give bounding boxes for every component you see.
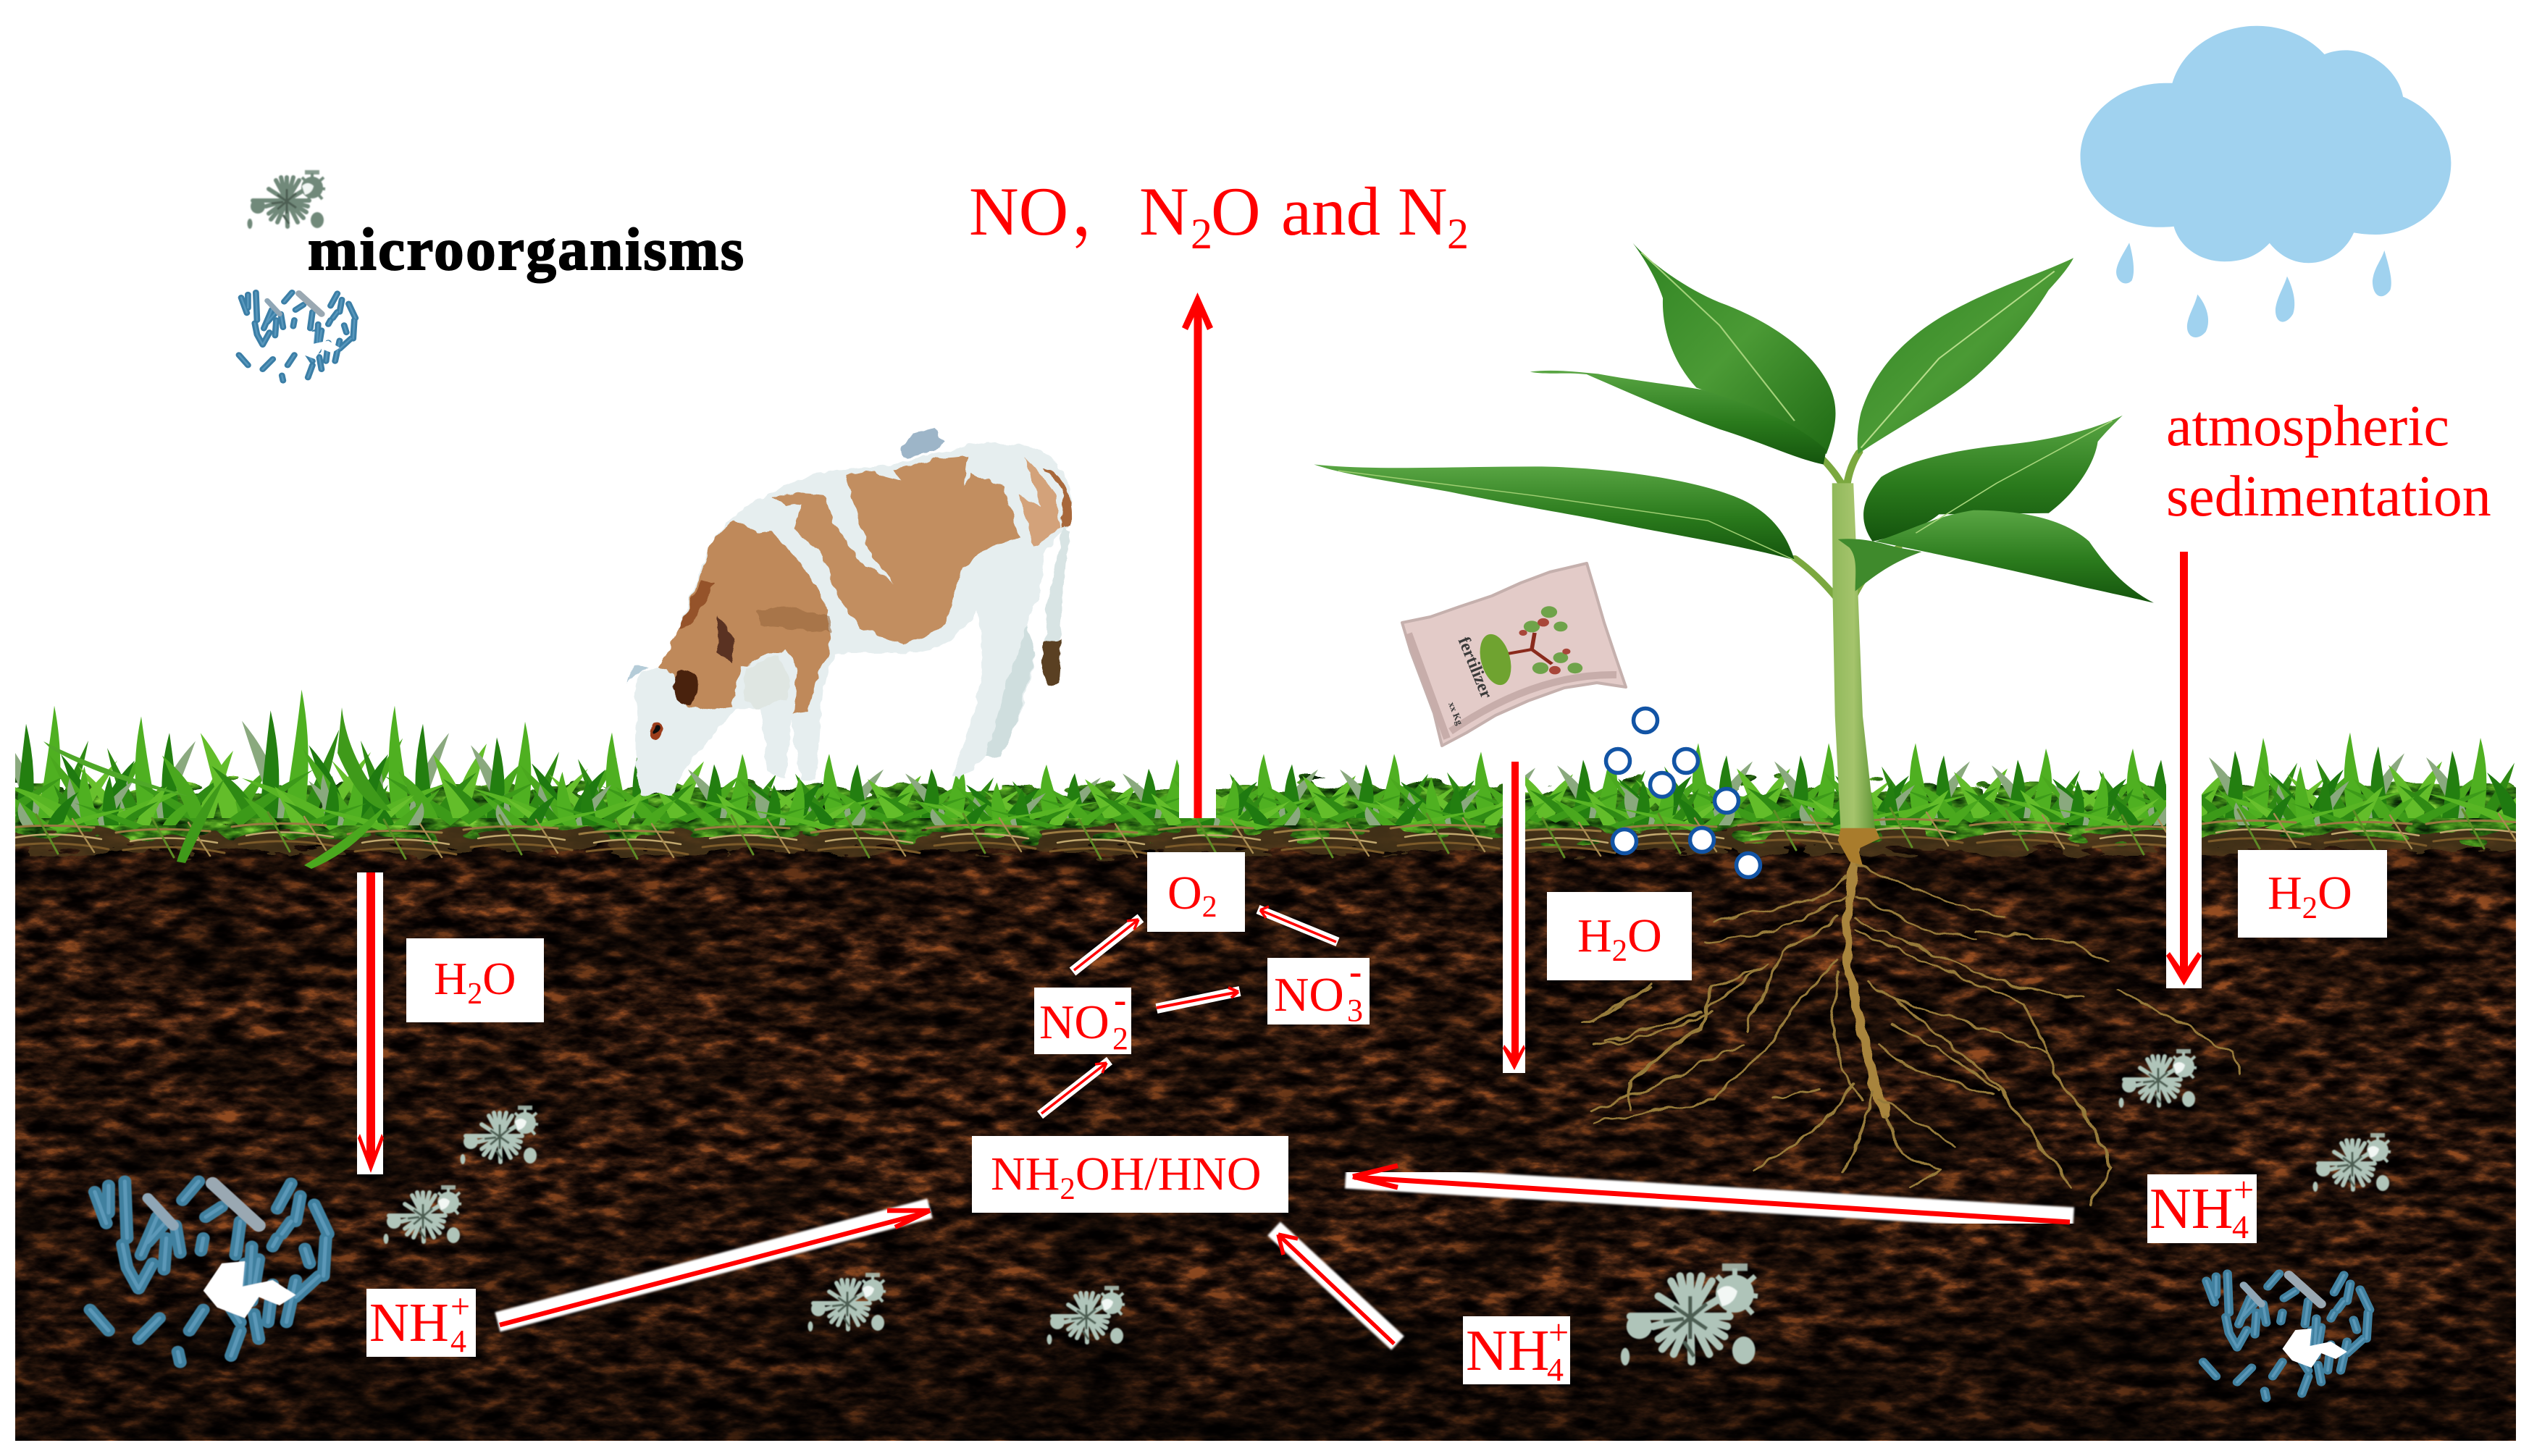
cow tail tuft xyxy=(1042,639,1062,685)
cow belly shadow xyxy=(757,606,831,632)
cow tail xyxy=(1043,467,1072,529)
cow brown shoulder patch xyxy=(659,521,831,714)
heading: gas products: and xyxy=(1281,173,1380,250)
arrow: NH4 bottom to NH2OH xyxy=(1274,1229,1398,1344)
cow neck spot xyxy=(717,614,734,662)
raindrop 4 xyxy=(2373,251,2391,296)
raindrop 1 xyxy=(2116,243,2134,283)
heading: gas products: NO xyxy=(969,173,1068,250)
arrow: NO3 to O2 xyxy=(1258,906,1338,942)
fertilizer granules xyxy=(1606,708,1760,878)
box: O2: 2 xyxy=(1202,891,1217,924)
box: NO3-: NO xyxy=(1274,968,1344,1022)
cow body xyxy=(636,442,1071,794)
leaf: right upper xyxy=(1863,416,2123,542)
box: NH4+ right xyxy=(2147,1169,2257,1245)
leaf: right top xyxy=(1858,258,2073,454)
arrow: NO2 to O2 xyxy=(1073,918,1141,972)
box: NH4+ bottom: NH xyxy=(1466,1319,1550,1383)
root collar xyxy=(1838,828,1880,865)
cow eye xyxy=(649,723,663,741)
cow rump patch xyxy=(1019,458,1060,547)
box: O2: O xyxy=(1167,867,1202,920)
tree roots xyxy=(1581,838,2241,1205)
box: H2O left xyxy=(406,938,544,1022)
grass strip xyxy=(0,689,2529,869)
arrow: atmospheric deposition xyxy=(2166,552,2202,988)
leaf: left thin xyxy=(1530,371,1826,465)
microbes: fungal spheres xyxy=(384,1049,2391,1365)
box: NO3-: - xyxy=(1349,951,1362,993)
box: NH4+ right: + xyxy=(2234,1169,2254,1210)
box: H2O middle: 2 xyxy=(1612,934,1627,968)
plant xyxy=(1314,243,2154,865)
heading: gas products: 2 xyxy=(1191,210,1212,258)
box: NH2OH/HNO: OH/HNO xyxy=(1075,1148,1261,1200)
box: NH4+ left xyxy=(366,1287,476,1359)
box: NH2OH/HNO xyxy=(972,1136,1288,1213)
box: NH2OH/HNO: 2 xyxy=(1060,1172,1075,1206)
box: NO2-: 2 xyxy=(1112,1021,1128,1056)
leaf: top midrib xyxy=(1642,253,1795,421)
box: NO3- xyxy=(1267,951,1370,1028)
leaf: right lower xyxy=(1876,510,2154,603)
cow ear xyxy=(674,668,698,704)
box: NH4+ left: 4 xyxy=(450,1324,466,1359)
fertilizer bag xyxy=(1402,563,1626,746)
bag body xyxy=(1402,563,1626,746)
arrow: gases rising xyxy=(1179,293,1216,818)
heading: gas products: N xyxy=(1139,173,1189,250)
microbe cluster: rods right xyxy=(2203,1274,2370,1398)
cow hind leg shade xyxy=(986,626,1036,755)
arrow: NH4 left to NH2OH xyxy=(498,1208,930,1325)
rain cloud xyxy=(2081,26,2451,337)
arrow: NH4 right to NH2OH xyxy=(1346,1166,2073,1222)
cow hump xyxy=(901,428,945,458)
box: H2O middle xyxy=(1547,892,1692,980)
bag inner shade xyxy=(1409,634,1616,738)
raindrop 2 xyxy=(2187,295,2208,337)
microbe cluster: rods left xyxy=(90,1182,328,1362)
box: NH4+ left: + xyxy=(450,1287,470,1326)
box: NO2-: NO xyxy=(1039,996,1110,1049)
cow xyxy=(626,428,1072,794)
box: NO3-: 3 xyxy=(1347,993,1363,1028)
arrow: NO2 to NO3 xyxy=(1157,988,1240,1009)
box: H2O left: 2 xyxy=(467,977,482,1011)
box: NH4+ right: 4 xyxy=(2232,1208,2249,1245)
leaf: right upper midrib xyxy=(1916,421,2112,533)
heading: gas products: ， xyxy=(1070,173,1139,250)
heading: gas products: 2 xyxy=(1447,210,1469,258)
roots reaching left xyxy=(1581,968,1760,1081)
box: NH4+ bottom xyxy=(1463,1312,1570,1388)
bag text: weight: xx Kg xyxy=(1446,700,1465,727)
cow chest fold xyxy=(744,656,790,708)
lateral roots xyxy=(1593,864,2241,1205)
box: NO2- xyxy=(1034,980,1131,1056)
box: H2O right: H xyxy=(2268,867,2302,920)
legend icon: fungal microbe xyxy=(248,170,325,229)
arrow: NH2OH to NO2 xyxy=(1040,1061,1110,1115)
arrow: water from fertilizer xyxy=(1503,762,1525,1073)
cow horn xyxy=(626,665,647,683)
label: atmospheric sedimentation: atmospheric xyxy=(2166,395,2449,458)
cow tail strand xyxy=(1045,526,1069,642)
cow brown flank patch xyxy=(771,456,1019,644)
box: H2O left: H xyxy=(434,953,467,1004)
heading: gas products: O xyxy=(1211,173,1261,250)
box: NH2OH/HNO: NH xyxy=(991,1148,1060,1200)
plant petioles xyxy=(1795,452,1898,599)
leaf: top xyxy=(1633,243,1836,454)
cloud xyxy=(2081,26,2451,263)
box: NH4+ right: NH xyxy=(2150,1177,2234,1241)
box: NH4+ bottom: 4 xyxy=(1547,1351,1564,1388)
small leaf at node xyxy=(1838,539,1921,592)
box: H2O right: 2 xyxy=(2302,891,2318,925)
label: microorganisms: microorganisms xyxy=(308,216,744,282)
bag tree xyxy=(1509,606,1582,674)
cow neck shadow xyxy=(679,581,714,628)
box: NH4+ bottom: + xyxy=(1548,1312,1569,1352)
box: H2O right: O xyxy=(2318,867,2352,920)
bag green label xyxy=(1475,631,1517,689)
label: atmospheric sedimentation: sedimentation xyxy=(2166,465,2491,529)
taproot xyxy=(1847,838,1886,1116)
bag text: fertilizer: fertilizer xyxy=(1454,634,1496,702)
raindrop 3 xyxy=(2276,277,2294,322)
arrow: water left xyxy=(357,872,384,1174)
legend icon: rod bacteria xyxy=(239,293,356,381)
box: H2O middle: H xyxy=(1577,909,1612,962)
leaf: long left midrib xyxy=(1338,471,1795,560)
box: O2 xyxy=(1147,852,1245,932)
box: NO2-: - xyxy=(1114,980,1126,1021)
box: H2O right xyxy=(2238,850,2387,938)
heading: gas products: N xyxy=(1398,173,1448,250)
leaf: long left xyxy=(1314,465,1795,560)
plant stem xyxy=(1832,483,1876,833)
box: NH4+ left: NH xyxy=(369,1292,449,1353)
leaf: right top midrib xyxy=(1861,272,2055,448)
box: H2O middle: O xyxy=(1627,909,1662,962)
box: H2O left: O xyxy=(482,953,516,1004)
soil cross-section xyxy=(15,815,2516,1440)
